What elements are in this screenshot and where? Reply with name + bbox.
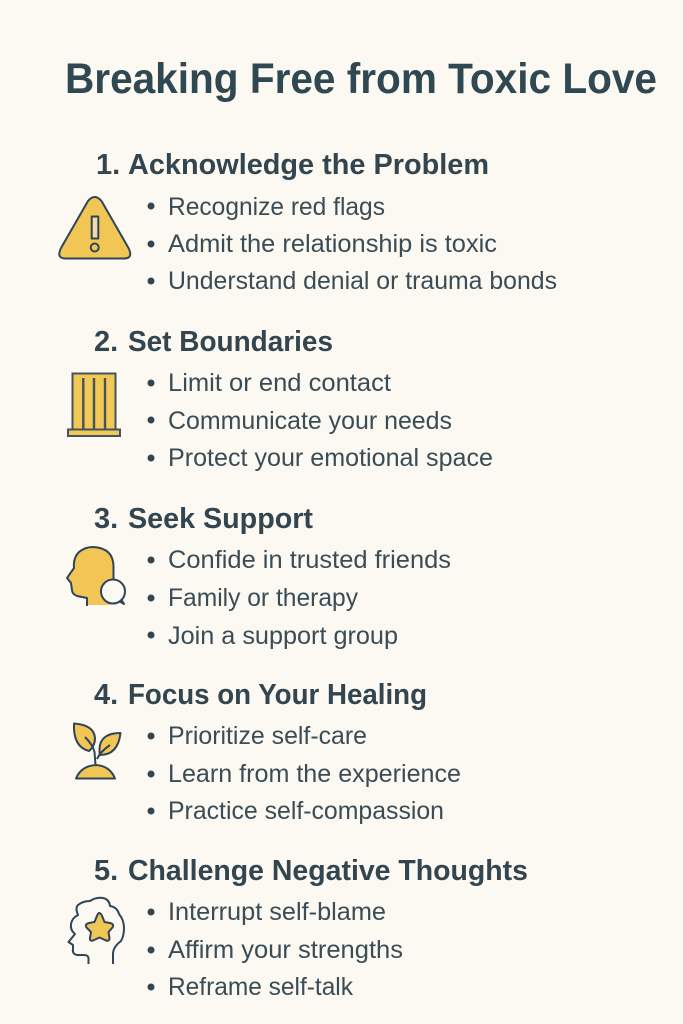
heading 3: Seek Support	[128, 503, 313, 535]
heading 1: 1.	[96, 149, 120, 181]
bullet list 5: Reframe self-talk	[168, 973, 353, 1001]
bullet list 1: Recognize red flags	[168, 193, 385, 221]
bullet list 4: Practice self-compassion	[168, 797, 444, 825]
heading 3: 3.	[94, 503, 118, 535]
section 3: Seek Support	[67, 503, 451, 650]
bullet list 2: Protect your emotional space	[168, 444, 493, 472]
section 5: Challenge Negative Thoughts	[68, 855, 528, 1001]
title: Breaking Free from Toxic Love	[65, 55, 657, 103]
bullet list 5: Interrupt self-blame	[168, 898, 386, 926]
heading 4: 4.	[94, 679, 118, 711]
icon: boundary fence	[68, 374, 120, 436]
section 2: Set Boundaries	[68, 326, 493, 472]
heading 2: 2.	[94, 326, 118, 358]
section 4: Focus on Your Healing	[74, 679, 461, 825]
bullet list 4: Prioritize self-care	[168, 722, 367, 750]
icon: warning triangle	[59, 197, 130, 258]
bullet list 3	[148, 546, 451, 650]
icon: head with star	[68, 898, 124, 964]
heading 1: Acknowledge the Problem	[128, 149, 489, 181]
bullet list 4	[148, 722, 461, 825]
bullet list 3: Join a support group	[168, 622, 398, 650]
bullet list 2: Communicate your needs	[168, 407, 452, 435]
bullet list 1: Understand denial or trauma bonds	[168, 267, 557, 295]
section 1: Acknowledge the Problem	[59, 149, 557, 295]
bullet list 3: Family or therapy	[168, 584, 358, 612]
bullet list 1: Admit the relationship is toxic	[168, 230, 497, 258]
heading 2: Set Boundaries	[128, 326, 333, 358]
bullet list 2	[148, 369, 493, 472]
heading 4: Focus on Your Healing	[128, 679, 427, 711]
bullet list 4: Learn from the experience	[168, 760, 461, 788]
bullet list 3: Confide in trusted friends	[168, 546, 451, 574]
bullet list 1	[148, 193, 557, 295]
bullet list 5	[148, 898, 403, 1001]
heading 5: 5.	[94, 855, 118, 887]
icon: sprout	[74, 724, 120, 778]
heading 5: Challenge Negative Thoughts	[128, 855, 528, 887]
bullet list 2: Limit or end contact	[168, 369, 391, 397]
bullet list 5: Affirm your strengths	[168, 936, 403, 964]
icon: head with speech bubble	[67, 547, 125, 606]
